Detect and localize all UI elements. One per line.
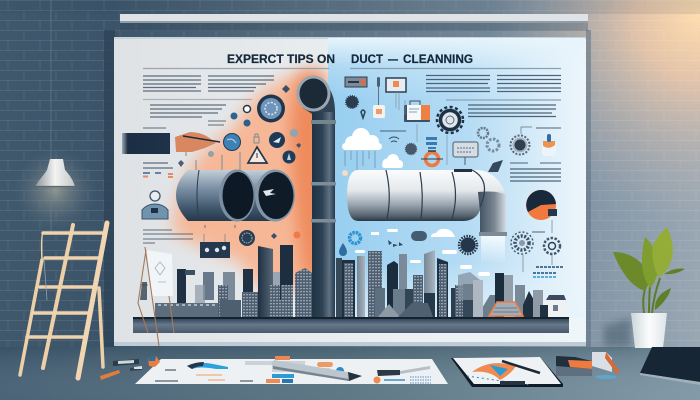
icon: wifi and fan bbox=[389, 137, 437, 154]
icon: fans bbox=[478, 128, 503, 172]
icon: control panel bbox=[453, 142, 478, 165]
right side icons bbox=[339, 77, 560, 276]
small leaves bbox=[655, 269, 685, 310]
icon: round badges bbox=[269, 132, 296, 164]
skyline bbox=[133, 245, 569, 333]
floor bbox=[0, 347, 700, 400]
icon: clouds bbox=[342, 128, 408, 179]
left duct bbox=[176, 170, 295, 222]
potted plant bbox=[604, 227, 685, 348]
icon: orange ring bbox=[421, 151, 443, 166]
left skyline buildings bbox=[155, 245, 312, 317]
icon: briefcase bbox=[404, 100, 430, 142]
title: DUCT bbox=[351, 54, 383, 66]
icon: gear badge bbox=[257, 94, 285, 122]
icon: technician bbox=[142, 191, 168, 219]
tape dispenser bbox=[592, 352, 620, 379]
vertical pipe bbox=[296, 76, 336, 318]
title: CLEANNING bbox=[403, 54, 473, 66]
left side icons bbox=[142, 85, 301, 258]
right text blocks bbox=[350, 68, 563, 277]
icon: flask bbox=[542, 134, 556, 156]
title: EXPERCT TIPS ON bbox=[227, 54, 335, 66]
wall-mounted top rail bbox=[120, 14, 588, 31]
icon: badge panel bbox=[200, 234, 230, 258]
icon: framed notice bbox=[386, 78, 406, 110]
laptop bbox=[640, 347, 700, 385]
icon: padlock and small marks bbox=[178, 85, 301, 170]
large chart sheet bbox=[135, 359, 448, 384]
right skyline buildings bbox=[336, 250, 543, 317]
title: — bbox=[388, 54, 398, 66]
panel: orange side bbox=[172, 70, 324, 290]
floor papers and tools bbox=[100, 347, 700, 387]
wooden ladder bbox=[20, 223, 107, 378]
leaf right bbox=[652, 227, 673, 277]
icon: pie chart bbox=[526, 190, 557, 233]
icon: lower clouds and small marks bbox=[355, 229, 490, 276]
poster board bbox=[114, 37, 586, 346]
icon: cleaning target bbox=[224, 134, 240, 150]
rolled marker bbox=[272, 356, 362, 381]
title bbox=[227, 54, 473, 66]
leaf left bbox=[613, 252, 649, 291]
icon: warning triangle bbox=[248, 147, 267, 163]
easel bbox=[138, 247, 174, 346]
icon: blue dots bbox=[230, 106, 250, 126]
stamp box bbox=[556, 356, 592, 376]
icon: round emblem bbox=[205, 225, 300, 246]
leaf centre bbox=[642, 237, 658, 288]
small pen on sheet bbox=[377, 366, 430, 376]
right duct bbox=[347, 169, 507, 264]
house bbox=[540, 295, 567, 317]
orange-roofed pavilion bbox=[489, 302, 523, 316]
pendant lamp bbox=[0, 0, 110, 240]
left text blocks bbox=[143, 68, 329, 243]
panel: blue side bbox=[328, 38, 585, 318]
icon: control device bbox=[345, 77, 367, 87]
icon: turbine gear bbox=[510, 127, 532, 154]
icon: hanging tag bbox=[361, 77, 385, 118]
icon: lower blue ring and droplet bbox=[339, 232, 360, 256]
icon: gears lower bbox=[459, 232, 560, 272]
hand with pen bbox=[122, 132, 220, 154]
icon: gear large bbox=[437, 107, 463, 165]
markers on floor bbox=[100, 356, 160, 380]
clipboard report bbox=[451, 357, 563, 387]
icon: dark gear bbox=[346, 96, 358, 108]
street band bbox=[133, 317, 569, 333]
